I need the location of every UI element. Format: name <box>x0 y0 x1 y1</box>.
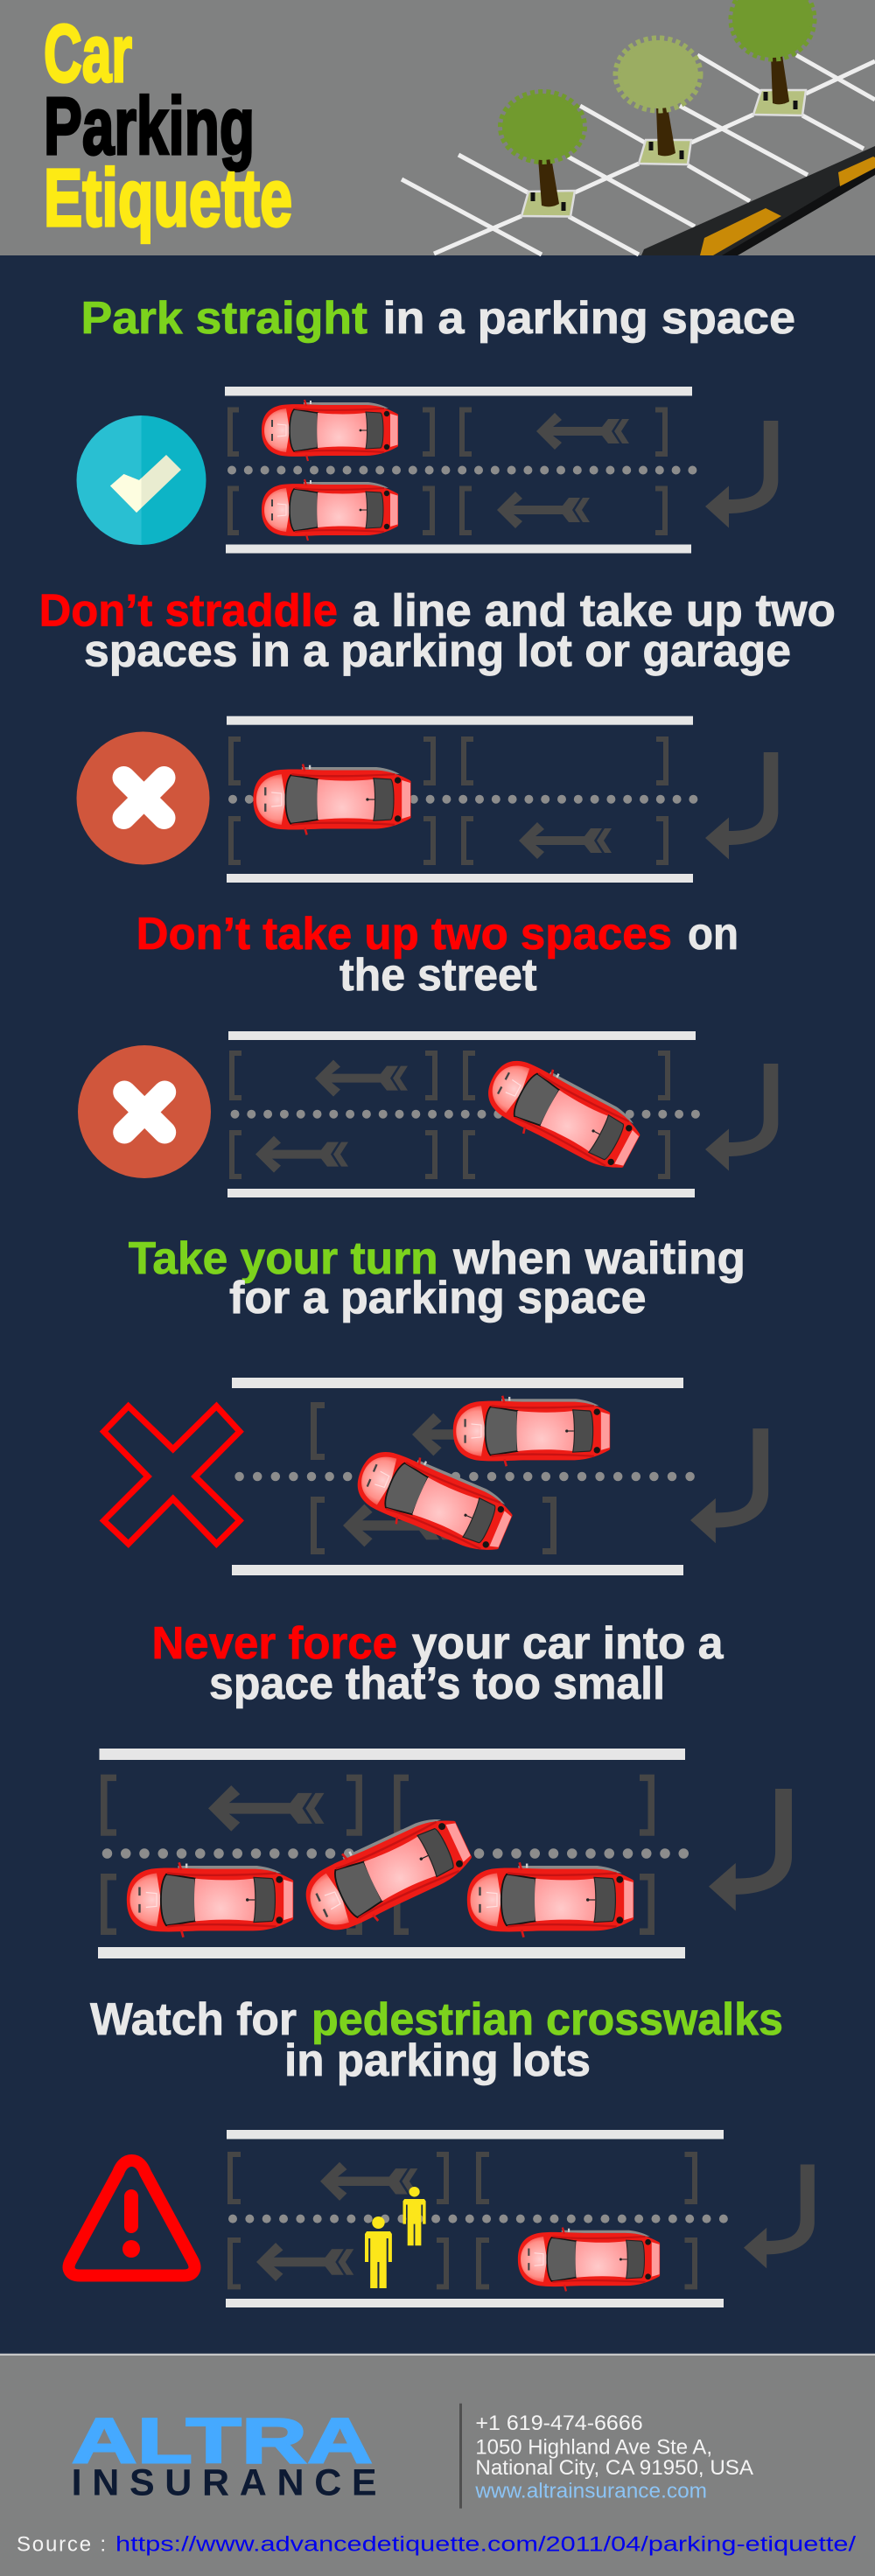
heading: never force: space that’s too small <box>209 1658 665 1709</box>
contact details: National City, CA 91950, USA <box>475 2456 753 2480</box>
header banner <box>0 0 875 255</box>
icon: outlined x <box>104 1407 240 1544</box>
contact details <box>474 2412 753 2503</box>
logo <box>72 2406 377 2504</box>
panel: two spaces on street diagram <box>78 1031 778 1197</box>
logo: INSURANCE <box>72 2462 377 2504</box>
contact details: +1 619-474-6666 <box>475 2412 643 2435</box>
heading: park straight <box>80 293 795 344</box>
panel: take your turn diagram <box>104 1378 768 1575</box>
panel: park straight diagram <box>77 387 778 553</box>
icon: x circle <box>77 731 210 864</box>
panel: too small diagram <box>98 1749 792 1958</box>
heading: never force <box>152 1618 724 1709</box>
source line <box>17 2533 856 2557</box>
heading: watch for pedestrians: in parking lots <box>284 2035 591 2086</box>
car: right <box>467 1862 634 1937</box>
arrow: bottom lane <box>497 492 590 528</box>
heading: don't take up two spaces: the street <box>340 950 537 1001</box>
parking curb <box>641 146 875 255</box>
panel: straddle diagram <box>77 716 778 883</box>
car: waiting <box>453 1396 610 1466</box>
car: forced in <box>294 1805 480 1945</box>
heading: never force: your car into a <box>412 1618 724 1669</box>
arrow: top lane <box>412 1414 520 1456</box>
contact details: www.altrainsurance.com <box>474 2480 707 2503</box>
title: Etiquette <box>44 152 292 243</box>
heading: don't straddle: a line and take up two <box>353 586 836 637</box>
arrow: top lane <box>320 2162 417 2201</box>
arrow: bottom lane <box>256 2243 354 2281</box>
icon: pedestrian front <box>365 2216 392 2288</box>
arrow: turn <box>705 421 778 528</box>
car: parked <box>518 2228 660 2291</box>
arrow: turn <box>705 752 778 859</box>
heading: don't take up two spaces: on <box>688 909 738 960</box>
title: Parking <box>44 80 255 171</box>
arrow: turn <box>744 2165 815 2268</box>
heading: take your turn: for a parking space <box>229 1273 646 1323</box>
heading: watch for pedestrians: Watch for <box>90 1994 297 2045</box>
arrow: turn <box>705 1064 778 1170</box>
arrow: top lane <box>315 1060 408 1097</box>
heading: watch for pedestrians <box>90 1994 783 2086</box>
icon: check mark <box>77 415 206 545</box>
heading: park straight: Park straight <box>80 293 368 344</box>
heading: take your turn: when waiting <box>452 1233 746 1284</box>
heading: don't take up two spaces: Don’t take up two spaces <box>136 909 672 960</box>
arrow: turn <box>690 1428 768 1543</box>
title <box>44 8 292 243</box>
heading: don't take up two spaces <box>136 909 738 1001</box>
source line: https://www.advancedetiquette.com/2011/04/parking-etiquette/ <box>116 2533 856 2557</box>
contact details: 1050 Highland Ave Ste A, <box>475 2436 712 2460</box>
car: top <box>262 400 398 461</box>
car: straddling <box>253 764 411 834</box>
icon: x circle <box>78 1045 211 1178</box>
heading: don't straddle: Don’t straddle <box>39 586 338 637</box>
panel: crosswalk diagram <box>69 2130 815 2307</box>
heading: park straight: in a parking space <box>383 293 795 344</box>
arrow: lane <box>208 1785 324 1832</box>
car: bottom <box>262 479 398 541</box>
heading: take your turn: Take your turn <box>129 1233 438 1284</box>
arrow: lane <box>519 822 612 859</box>
heading: don't straddle: spaces in a parking lot or garage <box>84 626 791 677</box>
tree island 1 <box>501 93 584 217</box>
heading: don't straddle <box>39 586 836 677</box>
logo: ALTRA <box>72 2406 373 2477</box>
car: cutting in <box>347 1438 519 1565</box>
heading: watch for pedestrians: pedestrian crosswalks <box>312 1994 783 2045</box>
heading: never force: Never force <box>152 1618 397 1669</box>
tree island 2 <box>617 39 699 164</box>
icon: pedestrian back <box>402 2187 426 2245</box>
car: angled <box>476 1046 648 1183</box>
tree island 3 <box>732 0 814 115</box>
icon: warning triangle <box>69 2161 194 2276</box>
arrow: turn <box>709 1789 792 1911</box>
arrow: top lane <box>536 413 629 450</box>
car: left <box>127 1862 293 1937</box>
source line: Source : <box>17 2533 106 2557</box>
heading: take your turn <box>129 1233 746 1323</box>
arrow: bottom lane <box>256 1136 348 1173</box>
title: Car <box>44 8 132 99</box>
parking lot lines <box>402 55 875 255</box>
arrow: bottom lane <box>343 1504 451 1546</box>
footer <box>0 2354 875 2576</box>
